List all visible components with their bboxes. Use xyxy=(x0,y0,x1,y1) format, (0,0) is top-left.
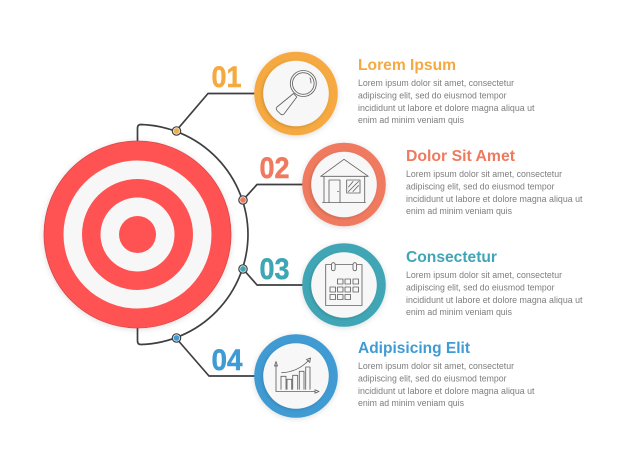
step 01 number: 01 xyxy=(212,61,242,94)
text block 2: enim ad minim veniam quis xyxy=(406,206,512,217)
step 04 number: 04 xyxy=(212,344,243,377)
text block 4: enim ad minim veniam quis xyxy=(358,398,464,409)
text block 3 xyxy=(406,249,583,318)
text block 2: adipiscing elit, sed do eiusmod tempor xyxy=(406,182,554,192)
text block 3: adipiscing elit, sed do eiusmod tempor xyxy=(406,282,554,294)
text block 4: incididunt ut labore et dolore magna aliqua ut xyxy=(358,386,535,397)
step 03 number: 03 xyxy=(260,253,290,286)
text block 3: Lorem ipsum dolor sit amet, consectetur xyxy=(406,270,562,281)
connector dot 4 xyxy=(172,334,181,342)
text block 1: Lorem ipsum dolor sit amet, consectetur xyxy=(358,78,514,89)
text block 4: adipiscing elit, sed do eiusmod tempor xyxy=(358,374,506,384)
target xyxy=(44,141,231,328)
text block 2: incididunt ut labore et dolore magna aliqua ut xyxy=(406,194,583,205)
text block 4 xyxy=(358,340,535,409)
arc and connector lines xyxy=(138,94,305,376)
badge 3: calendar xyxy=(302,243,386,327)
badge 1: magnifier xyxy=(254,52,338,135)
badge 2: house xyxy=(302,143,386,226)
text block 1: incididunt ut labore et dolore magna aliqua ut xyxy=(358,103,535,114)
text block 3: incididunt ut labore et dolore magna aliqua ut xyxy=(406,295,583,306)
text block 3: Consectetur xyxy=(406,249,497,266)
connector dot 3 xyxy=(239,265,247,273)
connector dot 2 xyxy=(239,196,247,204)
text block 2 xyxy=(406,148,583,217)
text block 1: adipiscing elit, sed do eiusmod tempor xyxy=(358,90,506,102)
connector dot 1 xyxy=(172,127,181,135)
badge 4: growth chart xyxy=(254,334,338,418)
text block 3: enim ad minim veniam quis xyxy=(406,307,512,318)
step 02 number: 02 xyxy=(260,152,290,185)
text block 1: Lorem Ipsum xyxy=(358,57,456,74)
text block 4: Adipisicing Elit xyxy=(358,340,471,357)
text block 4: Lorem ipsum dolor sit amet, consectetur xyxy=(358,361,514,372)
text block 1: enim ad minim veniam quis xyxy=(358,115,464,126)
text block 2: Lorem ipsum dolor sit amet, consectetur xyxy=(406,169,562,180)
text block 2: Dolor Sit Amet xyxy=(406,148,516,165)
text block 1 xyxy=(358,57,535,126)
